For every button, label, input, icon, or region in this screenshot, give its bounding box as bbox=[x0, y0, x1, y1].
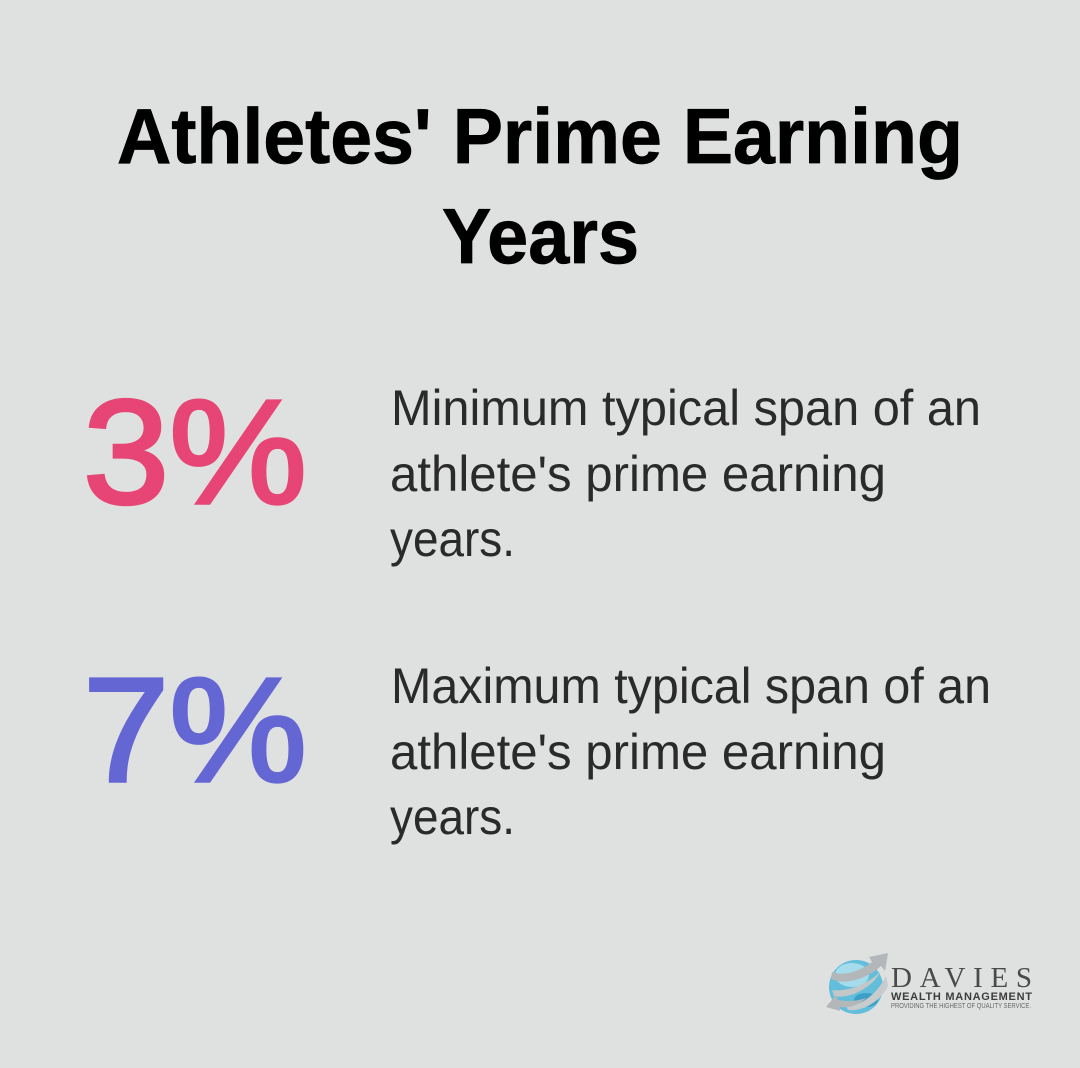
wordmark: DAVIES bbox=[891, 962, 1032, 994]
description: minimum span bbox=[390, 380, 981, 567]
logo: Davies Wealth Management bbox=[826, 953, 1032, 1014]
tagline: PROVIDING THE HIGHEST OF QUALITY SERVICE. bbox=[891, 1003, 1031, 1010]
icon: globe with arrows bbox=[826, 953, 888, 1014]
description: maximum span bbox=[390, 658, 991, 845]
title: Athletes' Prime Earning bbox=[117, 92, 963, 180]
description: minimum span: athlete's prime earning bbox=[390, 446, 886, 502]
description: maximum span: athlete's prime earning bbox=[390, 724, 886, 780]
wordmark subtitle: WEALTH MANAGEMENT bbox=[891, 991, 1032, 1003]
title bbox=[117, 92, 963, 280]
description: minimum span: years. bbox=[390, 511, 515, 567]
description: maximum span: years. bbox=[390, 789, 515, 845]
stat: 3%: 3% bbox=[83, 370, 307, 535]
stat: 7%: 7% bbox=[83, 648, 307, 813]
description: maximum span: Maximum typical span of an bbox=[391, 658, 991, 714]
title: Years bbox=[442, 192, 639, 280]
description: minimum span: Minimum typical span of an bbox=[391, 380, 981, 436]
